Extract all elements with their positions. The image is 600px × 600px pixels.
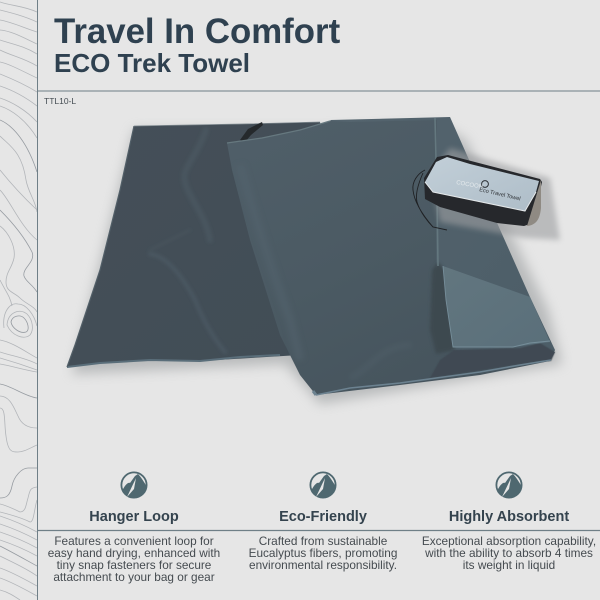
description: with the ability to absorb 4 times [424,546,593,560]
pouch grey end [527,180,541,226]
towel shadow [72,125,562,404]
title: Travel In Comfort [54,12,341,51]
towel back panel [67,122,330,367]
pouch [413,155,542,230]
product code: TTL10-L [44,96,76,106]
description [249,534,397,572]
subtitle: ECO Trek Towel [54,48,250,78]
description: easy hand drying, enhanced with [48,546,220,560]
description: tiny snap fasteners for secure [57,558,212,572]
feature: hanger loop [48,472,220,584]
front fold highlights [240,165,300,360]
towel front panel [227,120,555,395]
pouch light face [425,157,539,211]
description: attachment to your bag or gear [53,570,215,584]
heading: Highly Absorbent [449,509,569,525]
dark underside [430,343,555,378]
pouch dark body [424,155,542,226]
feature: eco-friendly [249,472,397,572]
topographic contour strip [0,2,37,600]
description: environmental responsibility. [249,558,397,572]
description: Eucalyptus fibers, promoting [249,546,397,560]
front hem [316,360,551,395]
towel back hem [67,355,280,367]
pouch logo mark [482,181,488,187]
feature: highly absorbent [422,472,596,572]
drawcord [413,170,447,230]
description: Features a convenient loop for [54,534,214,548]
description [422,534,596,572]
light flap corner [443,266,550,347]
towel right underlying panel [330,117,555,361]
vertical seam [435,118,438,266]
heading: Eco-Friendly [279,509,367,525]
description: Exceptional absorption capability, [422,534,596,548]
towel wrinkles [150,130,225,352]
hanger loop [240,122,263,142]
pouch product text: Eco Travel Towel [479,187,521,202]
pouch brand text: COCOON [456,180,483,191]
heading: Hanger Loop [89,509,179,525]
description [48,534,220,584]
dark inner fold [430,262,455,354]
photo: folded towel with pouch [67,117,562,404]
pouch shadow [430,148,560,240]
icon: mountain badge [121,472,147,498]
description: its weight in liquid [463,558,555,572]
icon: mountain badge [496,472,522,498]
description: Crafted from sustainable [259,534,388,548]
icon: mountain badge [310,472,336,498]
